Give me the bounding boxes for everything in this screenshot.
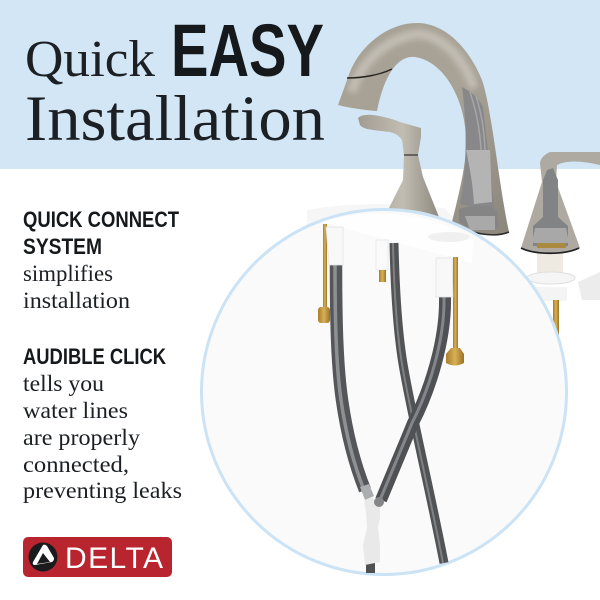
text block: quick connect system: installation — [23, 288, 131, 313]
deck cutaway — [322, 214, 473, 263]
text block: audible click: are properly — [23, 425, 141, 450]
right valve below deck — [527, 253, 575, 340]
water line: right hose — [380, 297, 445, 500]
text block: quick connect system — [23, 207, 179, 313]
text block: quick connect system: simplifies — [23, 261, 113, 286]
sink deck — [307, 204, 600, 300]
connector: right top — [436, 258, 453, 297]
connector: bottom Y — [360, 484, 384, 573]
water line: left hose — [335, 265, 365, 490]
text block: audible click: AUDIBLE CLICK — [23, 344, 166, 369]
background band — [0, 0, 600, 169]
text block: audible click — [23, 344, 182, 503]
faucet hole — [428, 232, 470, 242]
title: EASY — [171, 9, 324, 92]
logo: Delta — [23, 537, 172, 577]
brass rod: right — [446, 257, 464, 366]
water line: center hose — [393, 243, 444, 563]
title: Quick — [25, 31, 155, 88]
text block: audible click: water lines — [23, 398, 128, 423]
title — [25, 9, 325, 155]
magnifier circle — [202, 210, 566, 574]
text block: quick connect system: QUICK CONNECT — [23, 207, 179, 232]
faucet spout — [338, 23, 509, 235]
faucet handle: left — [358, 115, 439, 217]
faucet handle: right — [521, 152, 600, 253]
brass rod: left — [318, 224, 330, 323]
connector: left top — [326, 227, 343, 265]
text block: audible click: preventing leaks — [23, 478, 182, 503]
logo: Delta: DELTA — [65, 542, 163, 575]
title: Installation — [25, 83, 325, 155]
text block: audible click: connected, — [23, 452, 129, 477]
connector: center tube — [376, 240, 388, 282]
text block: audible click: tells you — [23, 371, 105, 396]
text block: quick connect system: SYSTEM — [23, 234, 102, 259]
